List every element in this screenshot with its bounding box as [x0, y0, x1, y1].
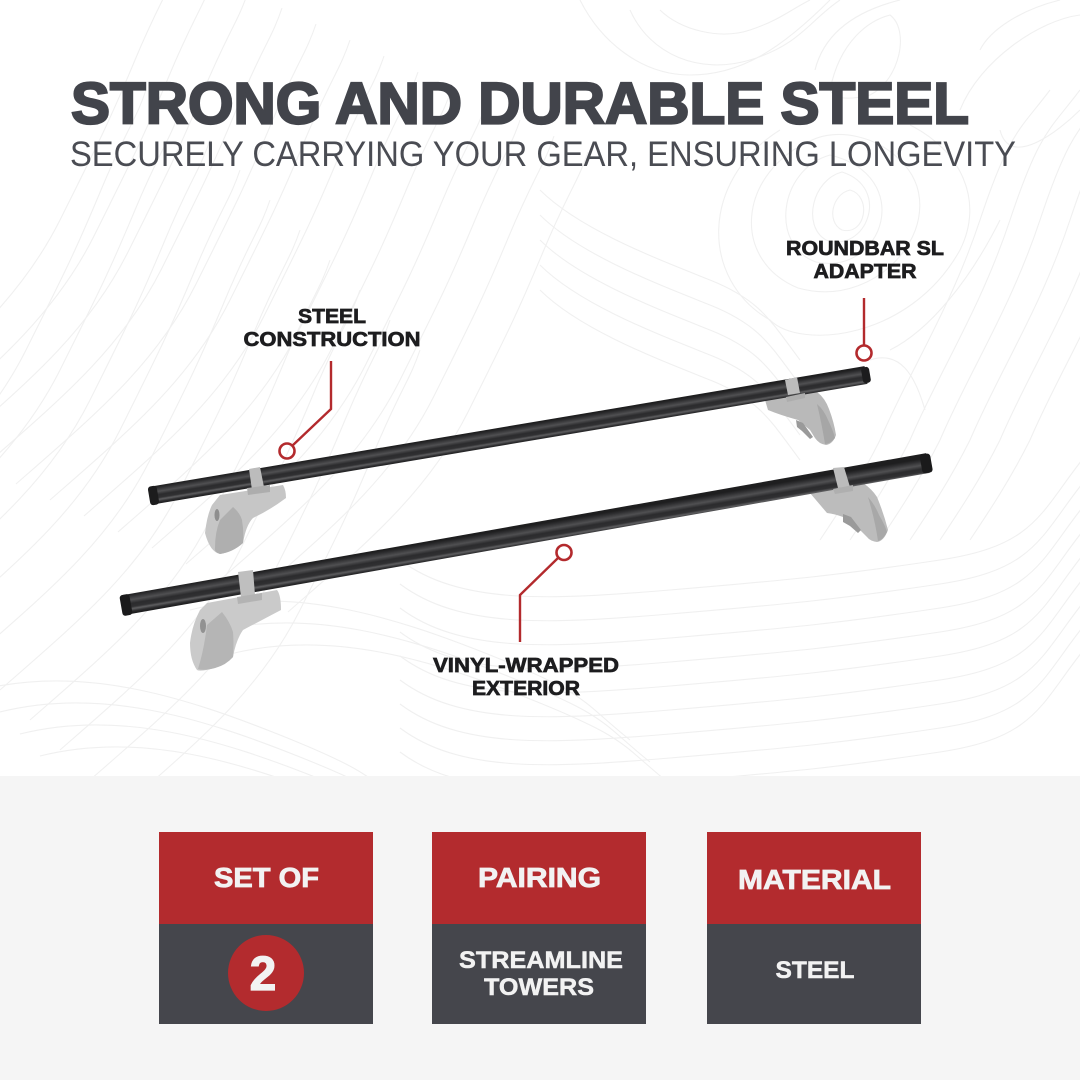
- callout: steel construction: CONSTRUCTION: [244, 329, 420, 351]
- bottom panel background: [0, 776, 1080, 1080]
- rear left tower: [205, 485, 286, 554]
- callout: vinyl-wrapped exterior: EXTERIOR: [472, 678, 581, 700]
- callout: roundbar sl adapter: ADAPTER: [814, 261, 917, 283]
- card: material: [707, 832, 921, 1024]
- card: set of 2: [159, 832, 373, 1024]
- front left tower: [190, 590, 281, 671]
- rear left clamp: [247, 467, 270, 495]
- card: pairing: TOWERS: [484, 974, 594, 1001]
- product: rear roof rack bar: [147, 366, 871, 554]
- card: pairing: [432, 832, 646, 1024]
- rear right clamp: [785, 377, 805, 402]
- product: front roof rack bar: [119, 453, 933, 671]
- callout: steel construction: [244, 306, 420, 458]
- card: pairing: PAIRING: [478, 862, 601, 893]
- title: STRONG AND DURABLE STEEL: [71, 72, 969, 136]
- callout: vinyl-wrapped exterior: [433, 545, 619, 700]
- subtitle: SECURELY CARRYING YOUR GEAR, ENSURING LONGEVITY: [70, 135, 1016, 174]
- card: material: STEEL: [776, 957, 854, 984]
- rear bar tube: [147, 366, 871, 506]
- callout: steel construction: STEEL: [298, 306, 366, 328]
- callout: vinyl-wrapped exterior: VINYL-WRAPPED: [433, 655, 619, 677]
- card: set of 2: SET OF: [214, 862, 319, 893]
- card: material: MATERIAL: [738, 864, 891, 895]
- front bar tube: [119, 453, 933, 616]
- card: set of 2: 2: [250, 948, 276, 1001]
- callout: roundbar sl adapter: ROUNDBAR SL: [786, 238, 944, 260]
- callout: roundbar sl adapter: [786, 238, 944, 360]
- front left clamp: [237, 570, 262, 604]
- front right clamp: [833, 467, 853, 494]
- card: pairing: STREAMLINE: [459, 947, 623, 974]
- front right tower: [810, 483, 888, 542]
- rear right tower: [765, 392, 836, 445]
